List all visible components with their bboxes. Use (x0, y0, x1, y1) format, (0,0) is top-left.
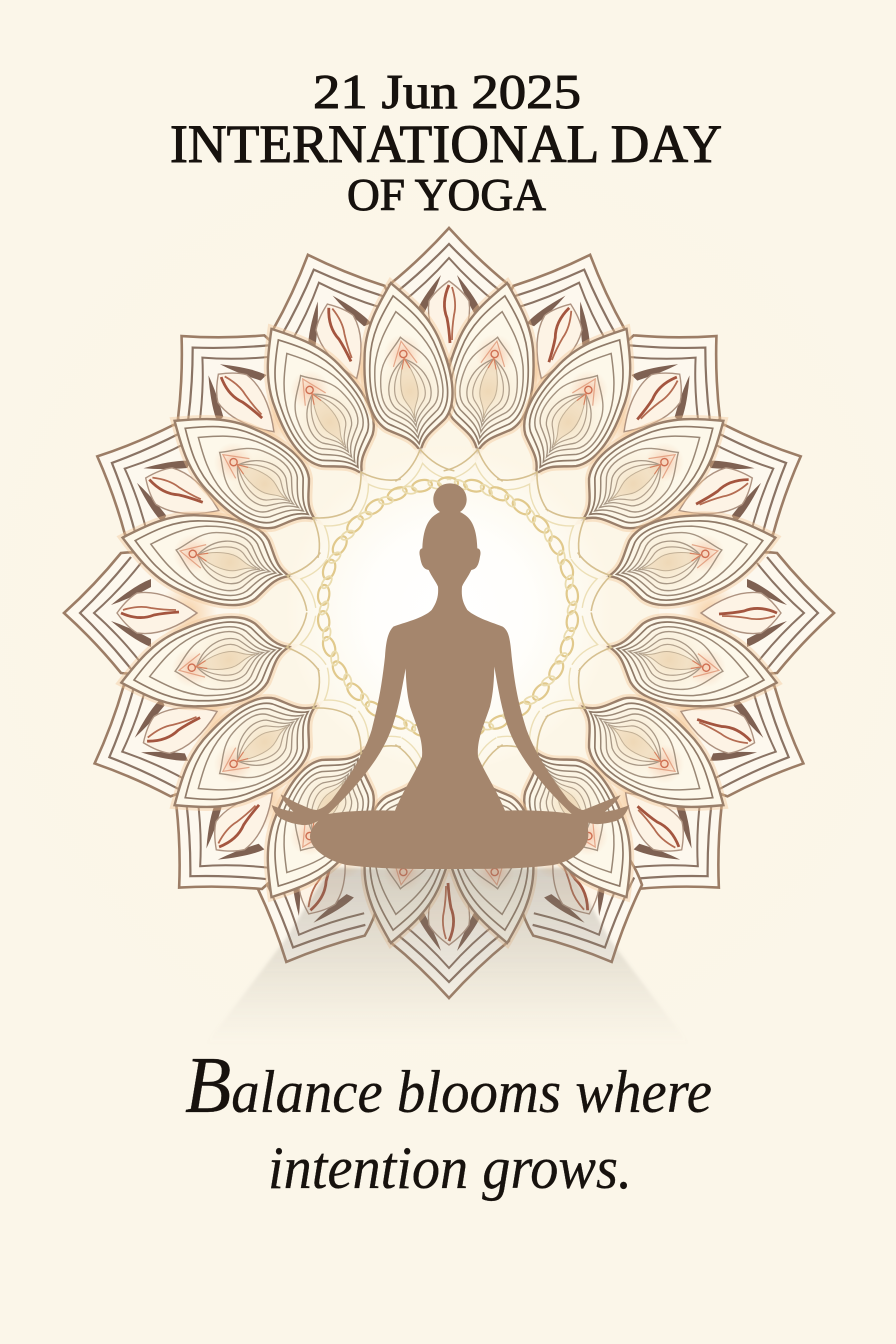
inner petal ring (112, 276, 786, 950)
tagline line one: Balance blooms where (185, 1042, 712, 1130)
central glow (287, 446, 611, 770)
date heading: 21 Jun 2025 (313, 64, 581, 119)
gold star ring (280, 444, 618, 782)
meditating figure silhouette (272, 483, 629, 869)
floor shadow wedge (205, 868, 690, 1045)
title line two: OF YOGA (347, 169, 546, 220)
tagline line two: intention grows. (268, 1135, 632, 1201)
outer petal ring (64, 228, 834, 998)
title line one: INTERNATIONAL DAY (170, 114, 722, 174)
mandala (64, 228, 834, 998)
chain ring (317, 477, 579, 739)
